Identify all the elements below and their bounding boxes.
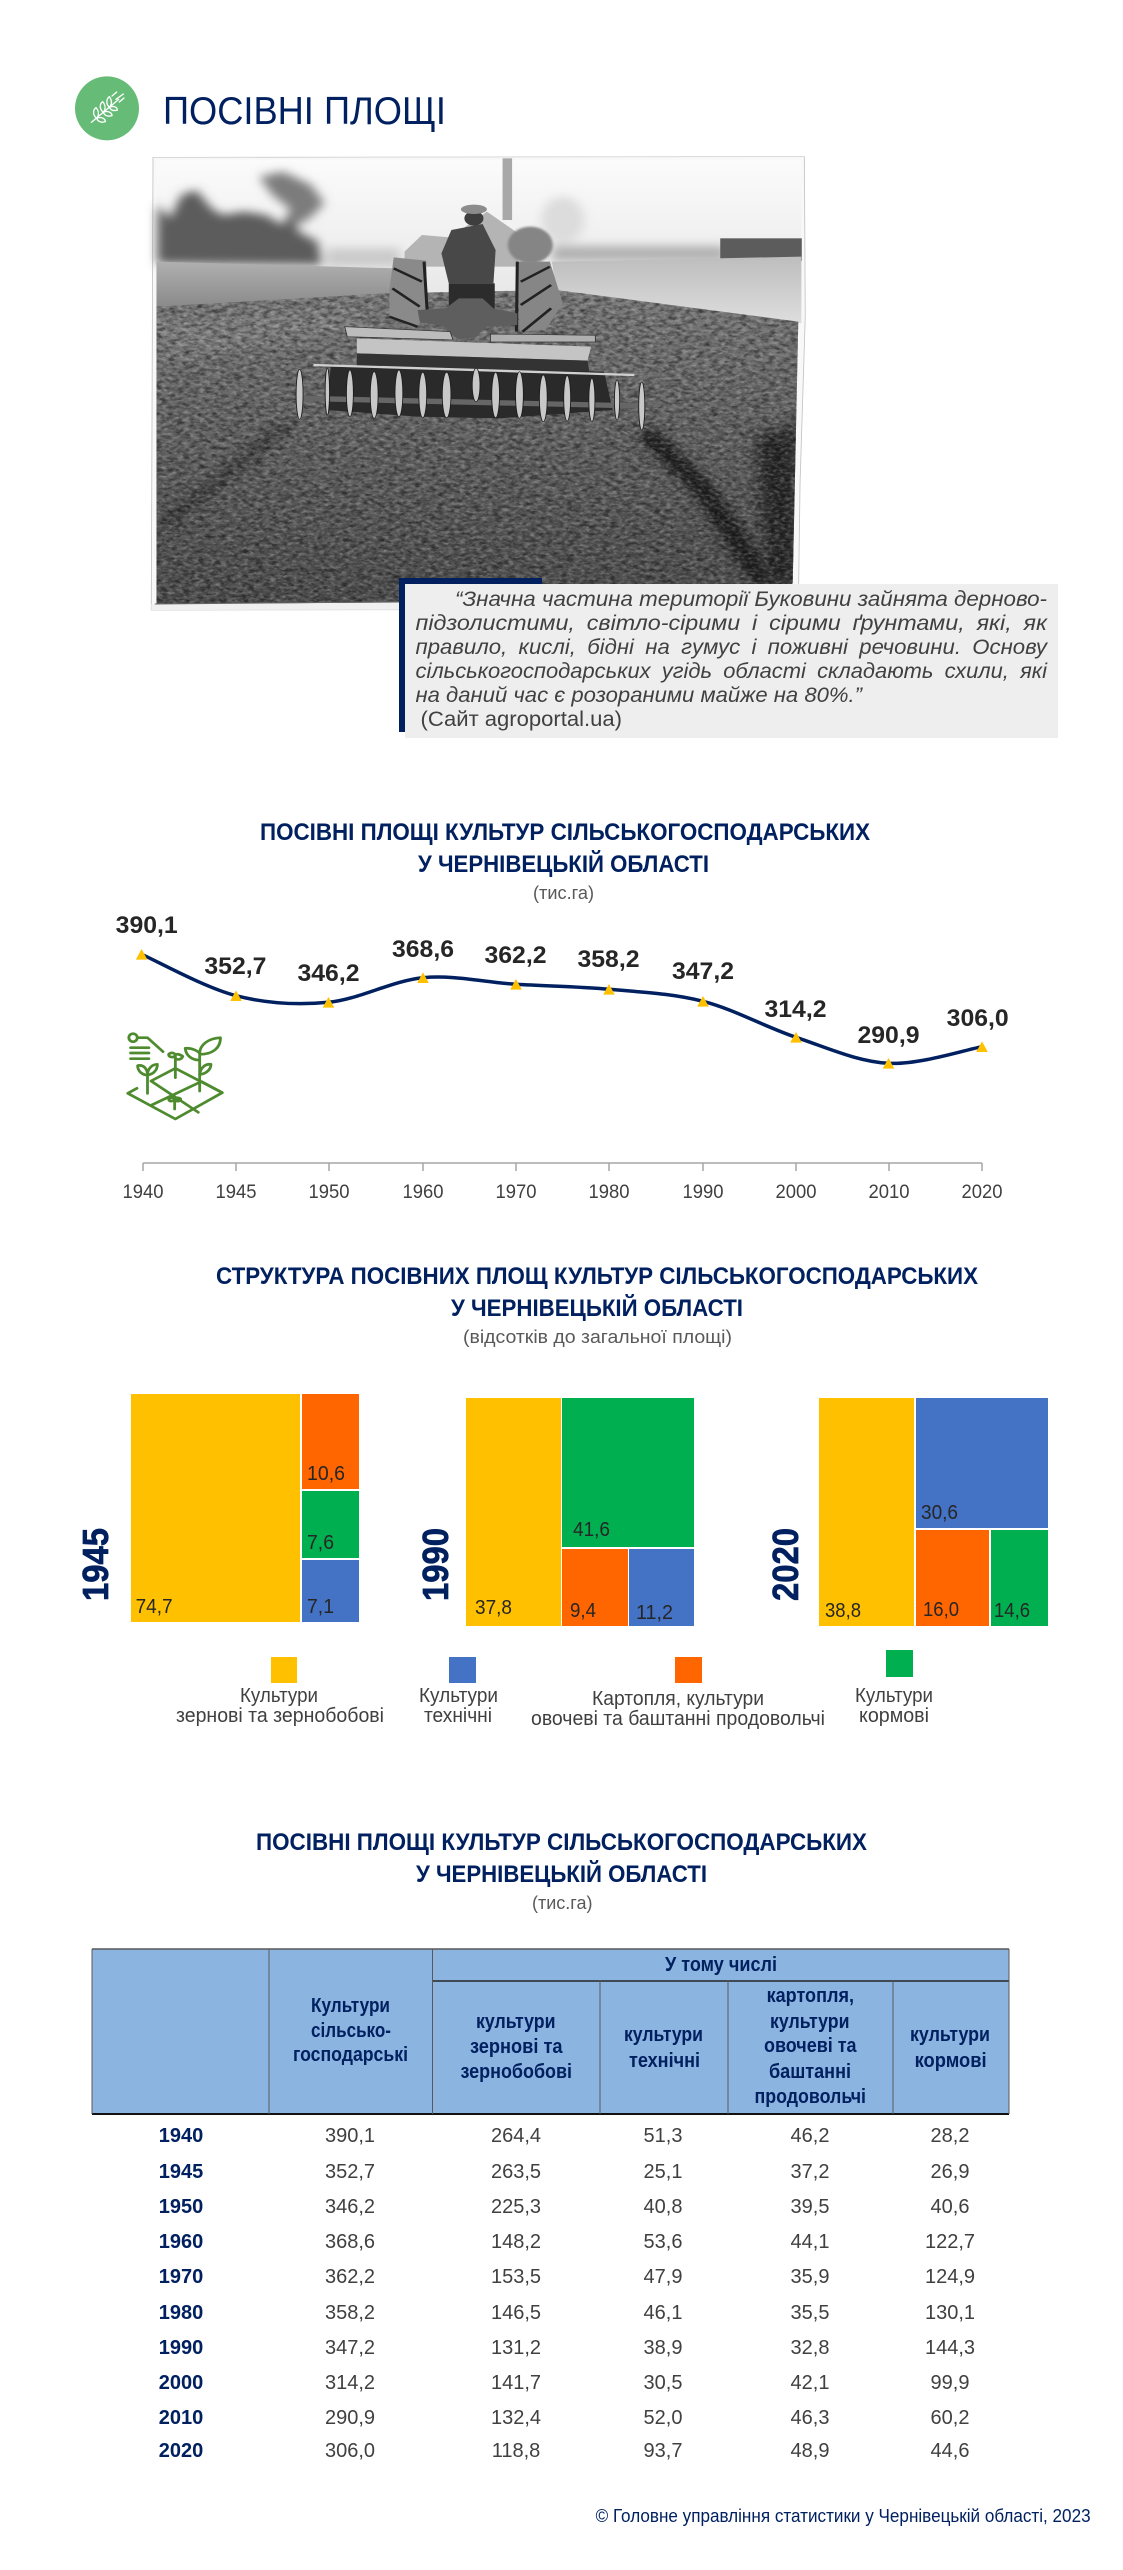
table row: 2000: 30,5 [644, 2372, 682, 2394]
heading: line chart: ПОСІВНІ ПЛОЩІ КУЛЬТУР СІЛЬСЬКОГОСПОДАРСЬКИХ [260, 819, 870, 846]
line chart: sown area 1940-2020: 306,0 [947, 1005, 1009, 1032]
table row: 1960: 44,1 [791, 2231, 829, 2253]
callout: quote: “Значна частина території Буковини зайнята дерново- [455, 587, 1047, 611]
treemap: 2020: 16,0 [923, 1599, 959, 1621]
line chart: sown area 1940-2020: 1950 [308, 1181, 350, 1203]
table row: 1950: 40,6 [931, 2196, 969, 2218]
table header: сільсько- [311, 2020, 391, 2042]
table row: 2010: 46,3 [791, 2407, 829, 2429]
legend: Картопля, культури [592, 1687, 764, 1710]
table row: 1960: 53,6 [644, 2231, 682, 2253]
table header: овочеві та [764, 2035, 857, 2057]
table header: продовольчі [754, 2086, 866, 2108]
table row: 1940: 46,2 [791, 2125, 829, 2147]
table row: 1940: 1940 [159, 2125, 203, 2147]
callout: quote: правило, кислі, бідні на гумус і поживні речовини. Основу [416, 635, 1048, 659]
table row: 2020: 48,9 [791, 2440, 829, 2462]
table row: 1940: 264,4 [491, 2125, 541, 2147]
table row: 1945: 1945 [159, 2161, 203, 2183]
treemap: 1945: 7,1 [307, 1596, 334, 1618]
table header: культури [910, 2024, 990, 2046]
table row: 1940: 28,2 [931, 2125, 969, 2147]
line chart: sown area 1940-2020 [116, 912, 1009, 1203]
treemap: 2020 [765, 1398, 1048, 1626]
heading: structure charts: (відсотків до загальної площі) [463, 1326, 732, 1347]
legend [176, 1650, 933, 1730]
line chart: sown area 1940-2020: 1960 [402, 1181, 444, 1203]
treemap: 2020: 38,8 [825, 1600, 861, 1622]
table header: культури [770, 2011, 850, 2033]
table row: 1950 [159, 2196, 969, 2218]
line chart: sown area 1940-2020: 362,2 [484, 942, 546, 969]
table row: 1970: 153,5 [491, 2266, 541, 2288]
legend: Культури [855, 1684, 933, 1707]
line chart: sown area 1940-2020: 352,7 [204, 953, 266, 980]
heading: line chart: У ЧЕРНІВЕЦЬКІЙ ОБЛАСТІ [418, 850, 709, 878]
table row: 1945: 352,7 [325, 2161, 375, 2183]
table row: 2020: 2020 [159, 2440, 203, 2462]
line chart: sown area 1940-2020: 390,1 [116, 912, 178, 939]
line chart: sown area 1940-2020: 358,2 [578, 946, 640, 973]
table row: 2000: 314,2 [325, 2372, 375, 2394]
table row: 2000: 141,7 [491, 2372, 541, 2394]
treemap: 1990: 41,6 [573, 1519, 610, 1541]
treemap: 1990: 1990 [415, 1528, 456, 1601]
treemap: 1990: 11,2 [636, 1602, 673, 1624]
table row: 1940 [159, 2125, 969, 2147]
table row: 1960: 1960 [159, 2231, 203, 2253]
table row: 1980: 46,1 [644, 2302, 682, 2324]
table row: 1970 [159, 2266, 975, 2288]
table row: 2000: 99,9 [931, 2372, 969, 2394]
treemap: 1945 [75, 1394, 359, 1622]
table row: 1990 [159, 2337, 975, 2359]
heading: structure charts: У ЧЕРНІВЕЦЬКІЙ ОБЛАСТІ [451, 1294, 743, 1322]
treemap: 1945: 1945 [75, 1528, 116, 1601]
table row: 1950: 225,3 [491, 2196, 541, 2218]
table row: 2020: 306,0 [325, 2440, 375, 2462]
table header: зернобобові [460, 2061, 572, 2083]
table row: 2000: 2000 [159, 2372, 203, 2394]
legend: кормові [859, 1704, 929, 1727]
line chart: sown area 1940-2020: 1945 [216, 1181, 257, 1203]
table row: 2010: 132,4 [491, 2407, 541, 2429]
table row: 2010: 52,0 [644, 2407, 682, 2429]
heading: line chart: (тис.га) [533, 882, 594, 903]
legend: технічні [424, 1704, 492, 1727]
table row: 1950: 346,2 [325, 2196, 375, 2218]
table row: 1990: 1990 [159, 2337, 203, 2359]
table header: культури [624, 2024, 703, 2046]
legend: зернові та зернобобові [176, 1704, 384, 1727]
line chart: sown area 1940-2020: 1970 [496, 1181, 537, 1203]
line chart: sown area 1940-2020: 1980 [588, 1181, 630, 1203]
table row: 1980: 130,1 [925, 2302, 975, 2324]
table row: 1945 [159, 2161, 969, 2183]
table header [92, 1949, 1009, 2114]
table row: 1945: 263,5 [491, 2161, 541, 2183]
treemap: 1990 [415, 1398, 694, 1626]
line chart: sown area 1940-2020: 2000 [776, 1181, 817, 1203]
heading: table [256, 1829, 867, 1913]
table row: 1950: 40,8 [644, 2196, 682, 2218]
table row: 1980: 35,5 [791, 2302, 829, 2324]
line chart: sown area 1940-2020: 290,9 [858, 1022, 920, 1049]
table row: 2010: 2010 [159, 2407, 203, 2429]
line chart: sown area 1940-2020: 314,2 [764, 996, 826, 1023]
table row: 1950: 1950 [159, 2196, 203, 2218]
table header: У тому числі [665, 1954, 777, 1976]
icon: wheat badge [75, 76, 139, 140]
table row: 1970: 362,2 [325, 2266, 375, 2288]
callout: quote: підзолистими, світло-сірими і сірими ґрунтами, які, як [416, 611, 1048, 635]
heading: line chart [260, 819, 870, 903]
table row: 1970: 47,9 [644, 2266, 682, 2288]
legend: овочеві та баштанні продовольчі [531, 1707, 825, 1730]
heading: table: ПОСІВНІ ПЛОЩІ КУЛЬТУР СІЛЬСЬКОГОСПОДАРСЬКИХ [256, 1829, 867, 1856]
table row: 1980 [159, 2302, 975, 2324]
table row: 1960: 368,6 [325, 2231, 375, 2253]
footer: copyright: © Головне управління статистики у Чернівецькій області, 2023 [596, 2506, 1091, 2526]
table header: Культури [311, 1995, 390, 2017]
table row: 1990: 131,2 [491, 2337, 541, 2359]
callout: quote [399, 578, 1058, 738]
table row: 1970: 124,9 [925, 2266, 975, 2288]
table row: 1990: 347,2 [325, 2337, 375, 2359]
icon: seedlings on plot [126, 1032, 224, 1120]
table row: 1980: 1980 [159, 2302, 203, 2324]
table row: 1950: 39,5 [791, 2196, 829, 2218]
table row: 1990: 38,9 [644, 2337, 682, 2359]
table row: 1945: 37,2 [791, 2161, 829, 2183]
line chart: sown area 1940-2020: 1990 [682, 1181, 724, 1203]
callout: quote: на даний час є розораними майже на 80%.” [416, 683, 863, 707]
table header: господарські [293, 2044, 408, 2066]
line chart: sown area 1940-2020: 1940 [122, 1181, 164, 1203]
callout: quote: (Сайт agroportal.ua) [420, 707, 622, 731]
treemap: 1945: 10,6 [307, 1463, 345, 1485]
table row: 2020: 118,8 [492, 2440, 540, 2462]
table header: кормові [915, 2050, 987, 2072]
table row: 2000 [159, 2372, 969, 2394]
treemap: 1990: 9,4 [570, 1600, 596, 1622]
table row: 1980: 146,5 [491, 2302, 541, 2324]
table header: баштанні [769, 2061, 851, 2083]
table row: 1945: 25,1 [644, 2161, 682, 2183]
legend: Культури [240, 1684, 318, 1707]
table row: 1970: 1970 [159, 2266, 203, 2288]
table row: 1960: 148,2 [491, 2231, 541, 2253]
heading: table: У ЧЕРНІВЕЦЬКІЙ ОБЛАСТІ [416, 1860, 707, 1888]
callout: quote: сільськогосподарських угідь області складають схили, які [416, 659, 1048, 683]
line chart: sown area 1940-2020: 368,6 [392, 936, 454, 963]
table row: 1970: 35,9 [791, 2266, 829, 2288]
treemap: 2020: 14,6 [994, 1600, 1030, 1622]
table header: технічні [629, 2050, 700, 2072]
table row: 2010: 60,2 [931, 2407, 969, 2429]
table row: 1940: 51,3 [644, 2125, 682, 2147]
photo: tractor with disc harrow in a field [149, 156, 806, 610]
treemap: 2020: 30,6 [921, 1502, 958, 1524]
legend: Культури [419, 1684, 498, 1707]
table header: картопля, [767, 1985, 854, 2007]
table row: 2000: 42,1 [791, 2372, 829, 2394]
table row: 1945: 26,9 [931, 2161, 969, 2183]
table row: 2020 [159, 2440, 969, 2462]
heading: structure charts: СТРУКТУРА ПОСІВНИХ ПЛОЩ КУЛЬТУР СІЛЬСЬКОГОСПОДАРСЬКИХ [216, 1263, 978, 1290]
table row: 1990: 32,8 [791, 2337, 829, 2359]
table row: 1960: 122,7 [925, 2231, 975, 2253]
table header: зернові та [470, 2036, 563, 2058]
line chart: sown area 1940-2020: 347,2 [672, 958, 734, 985]
line chart: sown area 1940-2020: 2020 [962, 1181, 1003, 1203]
table header: культури [476, 2011, 556, 2033]
table row: 1980: 358,2 [325, 2302, 375, 2324]
table row: 2020: 93,7 [644, 2440, 682, 2462]
table row: 1960 [159, 2231, 975, 2253]
treemap: 1945: 7,6 [307, 1532, 334, 1554]
title: ПОСІВНІ ПЛОЩІ [163, 90, 446, 133]
heading: table: (тис.га) [532, 1892, 592, 1913]
line chart: sown area 1940-2020: 346,2 [298, 960, 360, 987]
table row: 2010 [159, 2407, 969, 2429]
table row: 1940: 390,1 [325, 2125, 375, 2147]
treemap: 1945: 74,7 [136, 1596, 173, 1618]
table row: 1990: 144,3 [925, 2337, 975, 2359]
table row: 2020: 44,6 [931, 2440, 969, 2462]
treemap: 2020: 2020 [765, 1528, 806, 1601]
table row: 2010: 290,9 [325, 2407, 375, 2429]
heading: structure charts [216, 1263, 978, 1347]
treemap: 1990: 37,8 [475, 1597, 512, 1619]
line chart: sown area 1940-2020: 2010 [868, 1181, 910, 1203]
